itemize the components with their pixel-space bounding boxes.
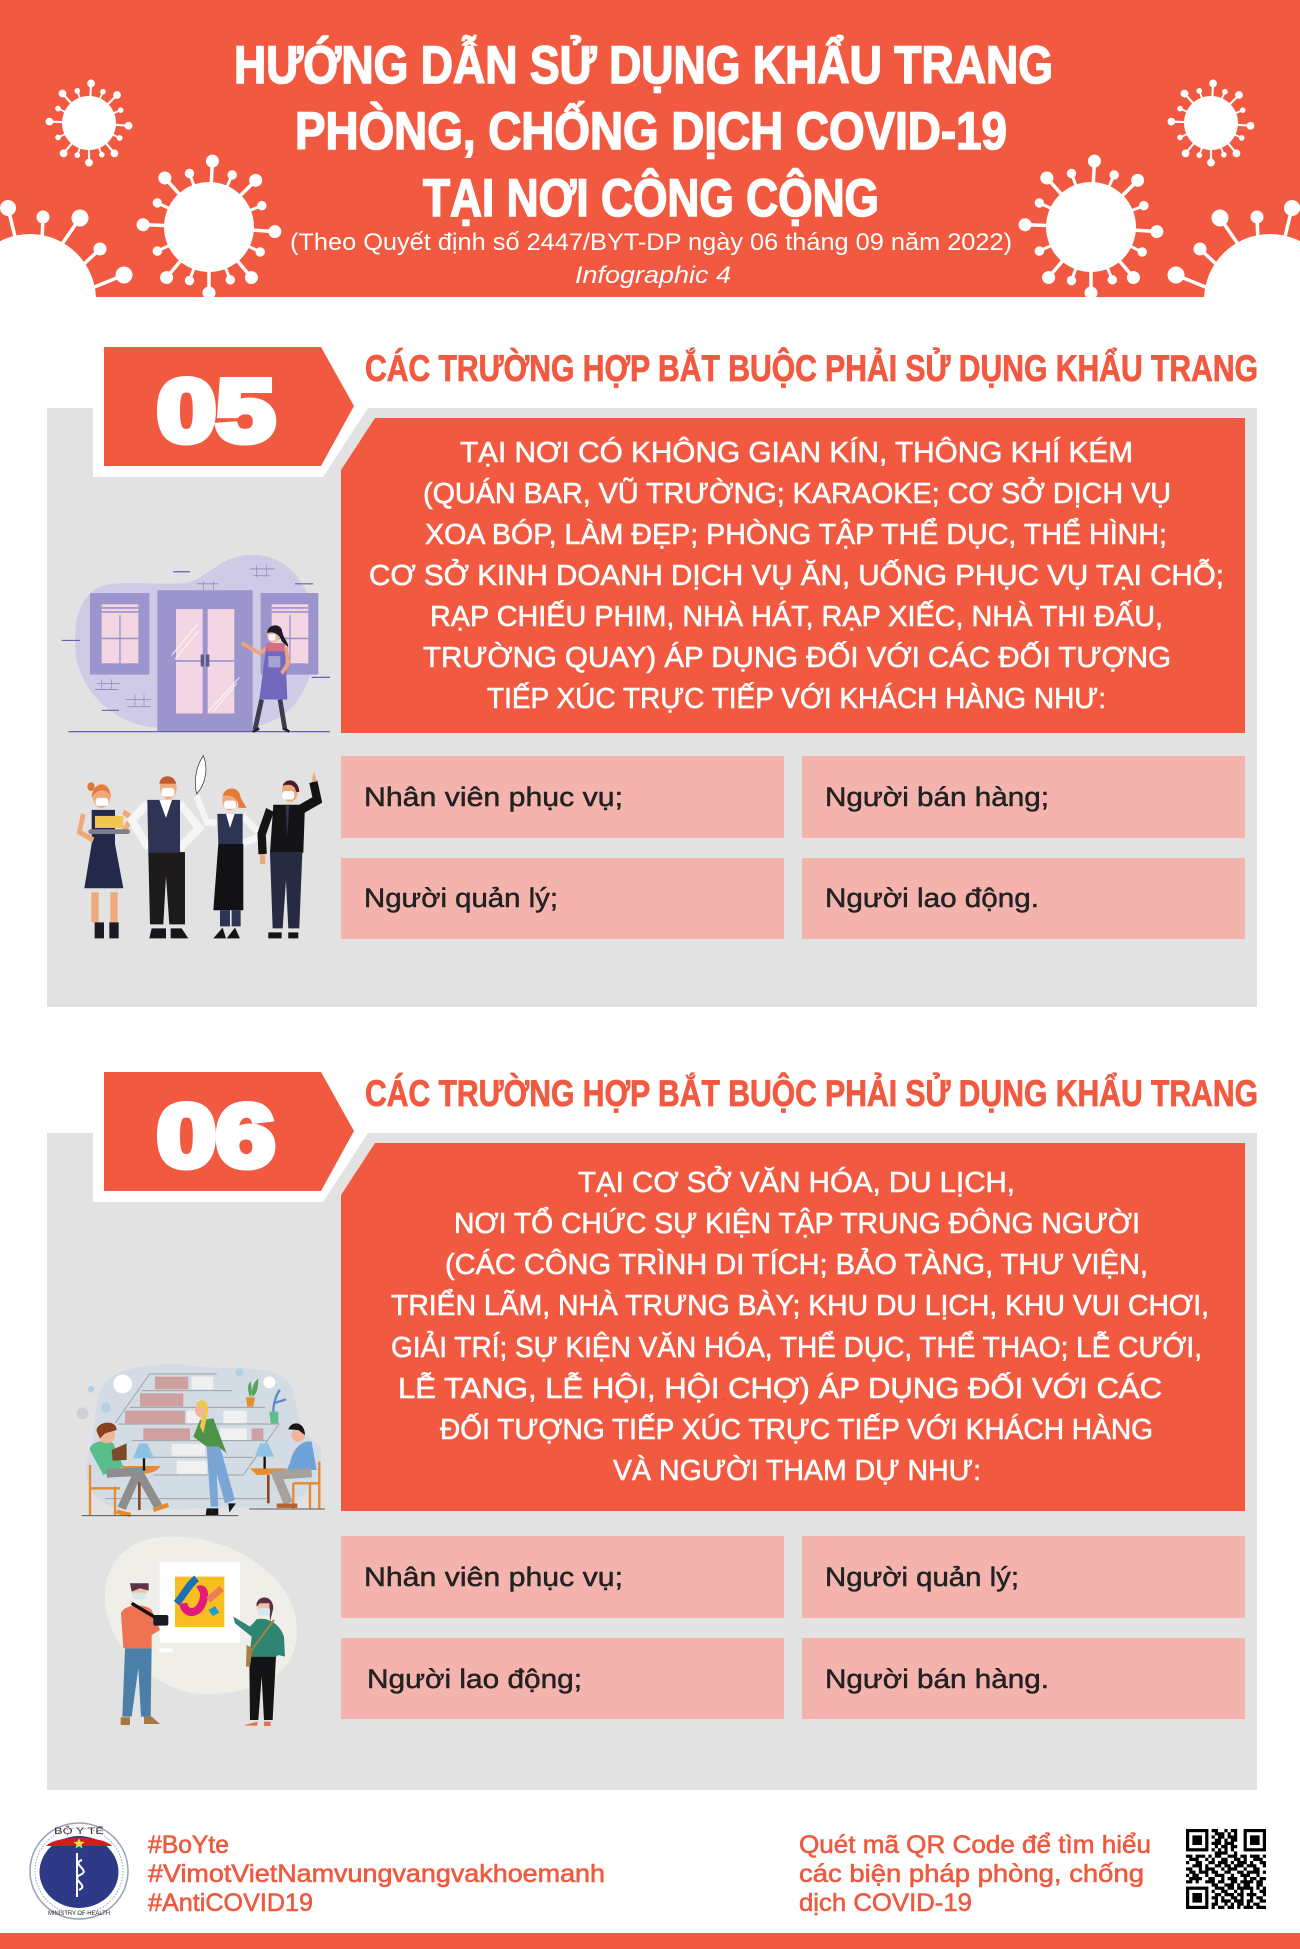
item: Nhân viên phục vụ	[341, 1536, 784, 1618]
person 4	[262, 771, 317, 938]
woman with bag	[233, 1597, 285, 1726]
badge 05	[104, 347, 354, 466]
red text box: TẠI NƠI CÓ KHÔNG GIAN KÍN, THÔNG KHÍ KÉM	[460, 435, 1133, 469]
person 3	[195, 756, 262, 938]
reader left	[90, 1423, 168, 1515]
logo: Ministry of Health	[30, 1823, 128, 1919]
illustration: art gallery	[105, 1537, 297, 1726]
lamps	[133, 1443, 274, 1471]
QR call to action: dịch COVID-19	[799, 1889, 972, 1917]
red text box: VÀ NGƯỜI THAM DỰ NHƯ:	[613, 1454, 981, 1487]
hashtags: #VimotVietNamvungvangvakhoemanh	[148, 1860, 605, 1888]
red text box: RẠP CHIẾU PHIM, NHÀ HÁT, RẠP XIẾC, NHÀ THI ĐẤU,	[430, 599, 1163, 633]
item: Người quản lý	[341, 858, 784, 939]
reader right	[250, 1423, 320, 1508]
panel: section 06	[47, 1065, 1258, 1790]
QR code	[1186, 1829, 1266, 1909]
badge 06: 06	[157, 1086, 275, 1185]
subtitle: (Theo Quyết định số 2447/BYT-DP ngày 06 tháng 09 năm 2022)	[290, 229, 1012, 256]
red text box: (CÁC CÔNG TRÌNH DI TÍCH; BẢO TÀNG, THƯ VIỆN,	[445, 1247, 1148, 1281]
QR call to action: Quét mã QR Code để tìm hiểu	[799, 1831, 1151, 1859]
item: Người lao động	[802, 858, 1245, 939]
plants	[246, 1378, 286, 1423]
red text box: LỄ TANG, LỄ HỘI, HỘI CHỢ) ÁP DỤNG ĐỐI VỚI CÁC	[398, 1371, 1162, 1405]
red text box: GIẢI TRÍ; SỰ KIỆN VĂN HÓA, THỂ DỤC, THỂ THAO; LỄ CƯỚI,	[391, 1330, 1202, 1364]
red text box: TRIỂN LÃM, NHÀ TRƯNG BÀY; KHU DU LỊCH, KHU VUI CHƠI,	[391, 1288, 1209, 1322]
red text box: XOA BÓP, LÀM ĐẸP; PHÒNG TẬP THỂ DỤC, THỂ HÌNH;	[425, 517, 1167, 551]
hashtags: #AntiCOVID19	[148, 1889, 313, 1917]
item: Người bán hàng	[802, 1638, 1245, 1719]
illustration: service staff	[79, 756, 317, 938]
title: TẠI NƠI CÔNG CỘNG	[423, 167, 879, 228]
item: Người lao động	[341, 1638, 784, 1719]
item: Nhân viên phục vụ: Nhân viên phục vụ;	[364, 782, 623, 812]
logo: Ministry of Health: BỘ Y TẾ	[54, 1826, 104, 1836]
item: Người quản lý: Người quản lý;	[825, 1562, 1019, 1592]
badge 06	[104, 1072, 354, 1191]
red text box: TIẾP XÚC TRỰC TIẾP VỚI KHÁCH HÀNG NHƯ:	[487, 681, 1106, 715]
red text box: NƠI TỔ CHỨC SỰ KIỆN TẬP TRUNG ĐÔNG NGƯỜI	[454, 1206, 1140, 1240]
red text box	[341, 418, 1245, 733]
item: Người lao động: Người lao động;	[367, 1664, 582, 1694]
hashtags: #BoYte	[148, 1831, 229, 1859]
icon: virus decorations	[0, 79, 1300, 366]
item: Nhân viên phục vụ: Nhân viên phục vụ;	[364, 1562, 623, 1592]
title	[234, 34, 1053, 228]
footer bar	[0, 1933, 1300, 1949]
person 1	[79, 782, 132, 938]
item: Nhân viên phục vụ	[341, 756, 784, 838]
logo: Ministry of Health: MINISTRY OF HEALTH	[48, 1910, 110, 1917]
infographic number: Infographic 4	[575, 262, 731, 289]
person 2	[132, 776, 199, 938]
item: Người bán hàng: Người bán hàng;	[825, 782, 1049, 812]
panel: section 05	[47, 340, 1258, 1007]
illustration: building with staff	[62, 555, 330, 732]
item: Người bán hàng	[802, 756, 1245, 838]
red text box: TRƯỜNG QUAY) ÁP DỤNG ĐỐI VỚI CÁC ĐỐI TƯỢNG	[423, 640, 1171, 674]
title: HƯỚNG DẪN SỬ DỤNG KHẨU TRANG	[234, 34, 1053, 95]
QR call to action: các biện pháp phòng, chống	[799, 1860, 1144, 1888]
header banner	[0, 0, 1300, 297]
man with camera	[121, 1583, 168, 1725]
red text box	[341, 1143, 1245, 1511]
title: PHÒNG, CHỐNG DỊCH COVID-19	[295, 101, 1007, 161]
item: Người bán hàng: Người bán hàng.	[825, 1664, 1049, 1694]
red text box: CƠ SỞ KINH DOANH DỊCH VỤ ĂN, UỐNG PHỤC VỤ TẠI CHỖ;	[369, 558, 1224, 592]
red text box: TẠI CƠ SỞ VĂN HÓA, DU LỊCH,	[578, 1165, 1015, 1199]
painting	[175, 1577, 224, 1627]
red text box: ĐỐI TƯỢNG TIẾP XÚC TRỰC TIẾP VỚI KHÁCH HÀNG	[440, 1412, 1153, 1446]
item: Người lao động: Người lao động.	[825, 883, 1039, 913]
item: Người quản lý: Người quản lý;	[364, 883, 558, 913]
footer	[0, 1823, 1300, 1949]
illustration: library	[77, 1364, 325, 1516]
red text box: (QUÁN BAR, VŨ TRƯỜNG; KARAOKE; CƠ SỞ DỊCH VỤ	[423, 476, 1171, 510]
hashtags	[148, 1831, 605, 1917]
standing woman	[193, 1400, 236, 1515]
item: Người quản lý	[802, 1536, 1245, 1618]
QR call to action	[799, 1831, 1151, 1917]
badge 05: 05	[157, 361, 275, 460]
